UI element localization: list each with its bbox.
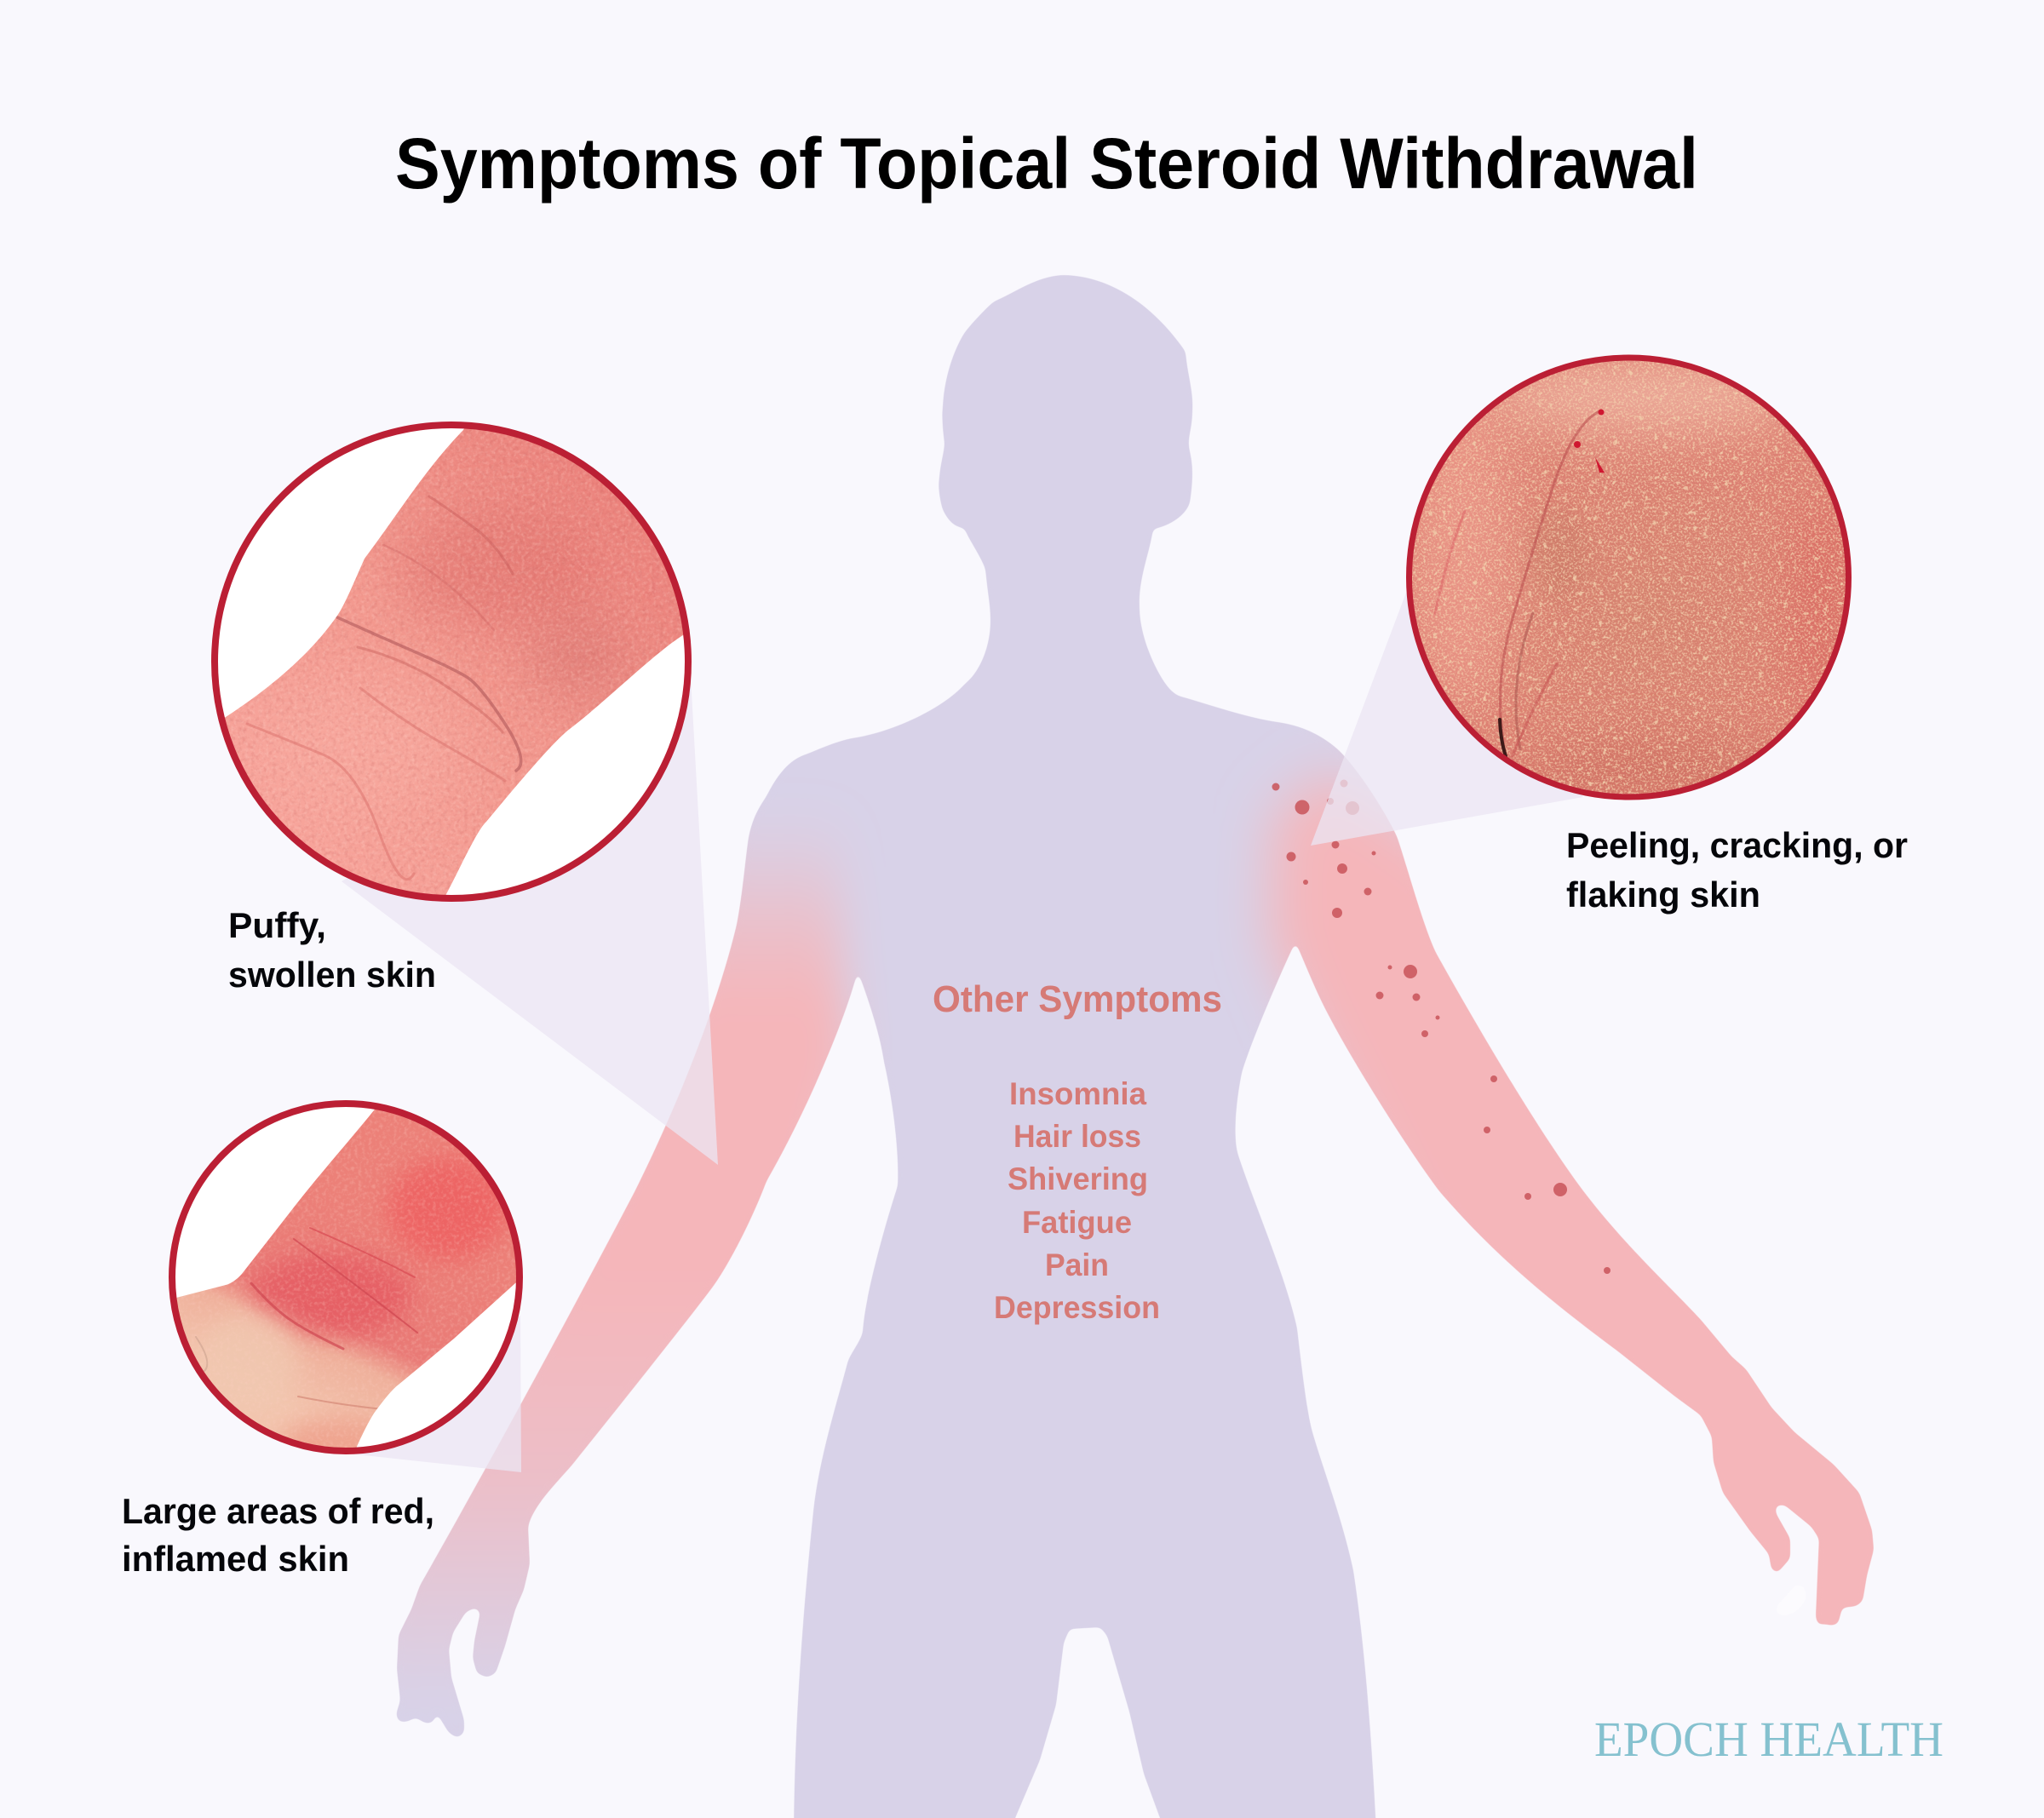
photo circle: peeling flaking skin — [1397, 349, 1857, 809]
callout cone: red inflamed skin — [356, 1316, 521, 1472]
brand logo text: EPOCH HEALTH — [1594, 1712, 1944, 1767]
other symptoms list: Hair loss — [1013, 1119, 1141, 1154]
other symptoms list: Pain — [1045, 1247, 1109, 1282]
title: Symptoms of Topical Steroid Withdrawal — [395, 123, 1698, 204]
other symptoms list: Fatigue — [1022, 1205, 1132, 1240]
photo circle: red inflamed wrist — [169, 1100, 523, 1454]
photo circle: puffy swollen wrist — [211, 422, 692, 902]
label: puffy swollen skin: swollen skin — [228, 955, 436, 995]
label: large areas of red inflamed skin — [122, 1491, 434, 1579]
label: large areas of red inflamed skin: Large areas of red, — [122, 1491, 434, 1531]
label: puffy swollen skin — [228, 905, 436, 995]
callout cone: peeling skin — [1311, 593, 1583, 846]
label: large areas of red inflamed skin: inflamed skin — [122, 1539, 349, 1579]
other symptoms list: Shivering — [1008, 1161, 1148, 1196]
other symptoms heading: Other Symptoms — [933, 978, 1222, 1020]
rash dots on right arm — [1272, 780, 1611, 1274]
label: peeling cracking flaking skin: Peeling, cracking, or — [1566, 825, 1908, 865]
other symptoms list — [994, 1076, 1160, 1325]
callout cone: puffy skin — [342, 677, 718, 1165]
other symptoms list: Depression — [994, 1290, 1160, 1325]
label: peeling cracking flaking skin — [1566, 825, 1908, 915]
body silhouette with inflamed arms — [397, 275, 1874, 1818]
label: peeling cracking flaking skin: flaking skin — [1566, 875, 1760, 915]
faint blob near right hand — [1777, 1586, 1806, 1615]
other symptoms list: Insomnia — [1009, 1076, 1146, 1111]
label: puffy swollen skin: Puffy, — [228, 905, 326, 945]
